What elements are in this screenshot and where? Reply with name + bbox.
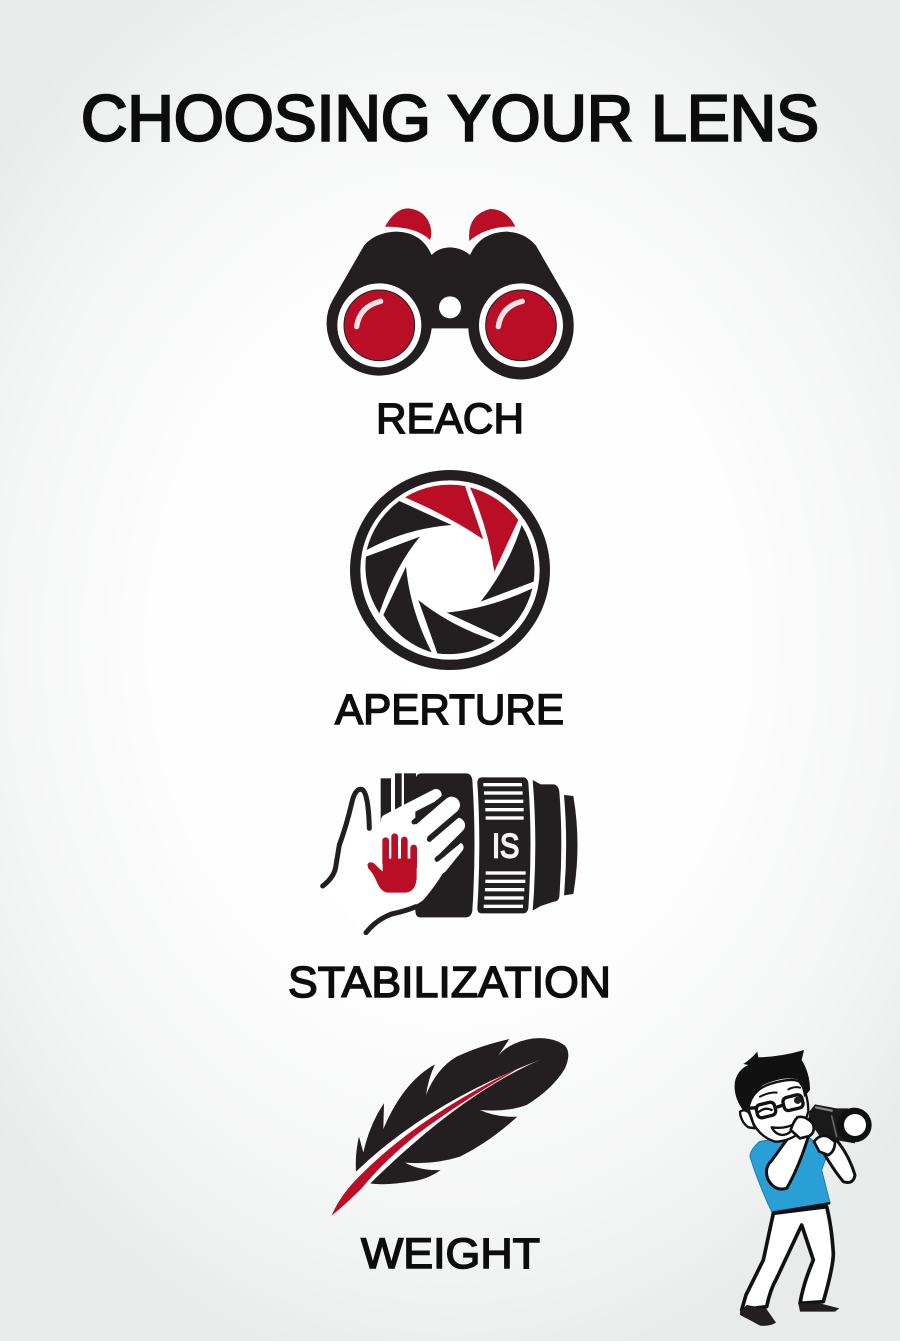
- label: reach: REACH: [376, 395, 524, 443]
- sub-element: hand outline: [323, 789, 369, 886]
- sub-element: shoes: [740, 1305, 776, 1326]
- sub-element: glasses and eyes: [747, 1087, 804, 1119]
- sub-element: ear and face: [740, 1110, 755, 1128]
- label: stabilization: STABILIZATION: [288, 958, 611, 1007]
- sub-element: shirt: [750, 1133, 830, 1212]
- label: aperture: APERTURE: [335, 686, 564, 734]
- sub-element: grip lines: [483, 783, 526, 908]
- icon: binoculars: [327, 208, 574, 379]
- sub-element: hands: [791, 1117, 814, 1138]
- sub-element: hair: [735, 1050, 810, 1112]
- sub-element: camera: [808, 1104, 855, 1143]
- icon: feather: [332, 1038, 568, 1216]
- sub-element: mouth: [772, 1123, 795, 1135]
- icon: stabilized lens with hand: [323, 773, 577, 933]
- sub-element: arms: [766, 1128, 808, 1189]
- sub-element: red palm: [367, 837, 417, 893]
- icon: aperture: [350, 470, 550, 670]
- sub-element: IS mark: IS: [492, 828, 519, 866]
- sub-element: trousers: [742, 1207, 833, 1310]
- title: CHOOSING YOUR LENS: [81, 82, 819, 154]
- label: weight: WEIGHT: [361, 1230, 540, 1278]
- character: photographer: [735, 1050, 872, 1326]
- sub-element: white hand: [323, 789, 459, 933]
